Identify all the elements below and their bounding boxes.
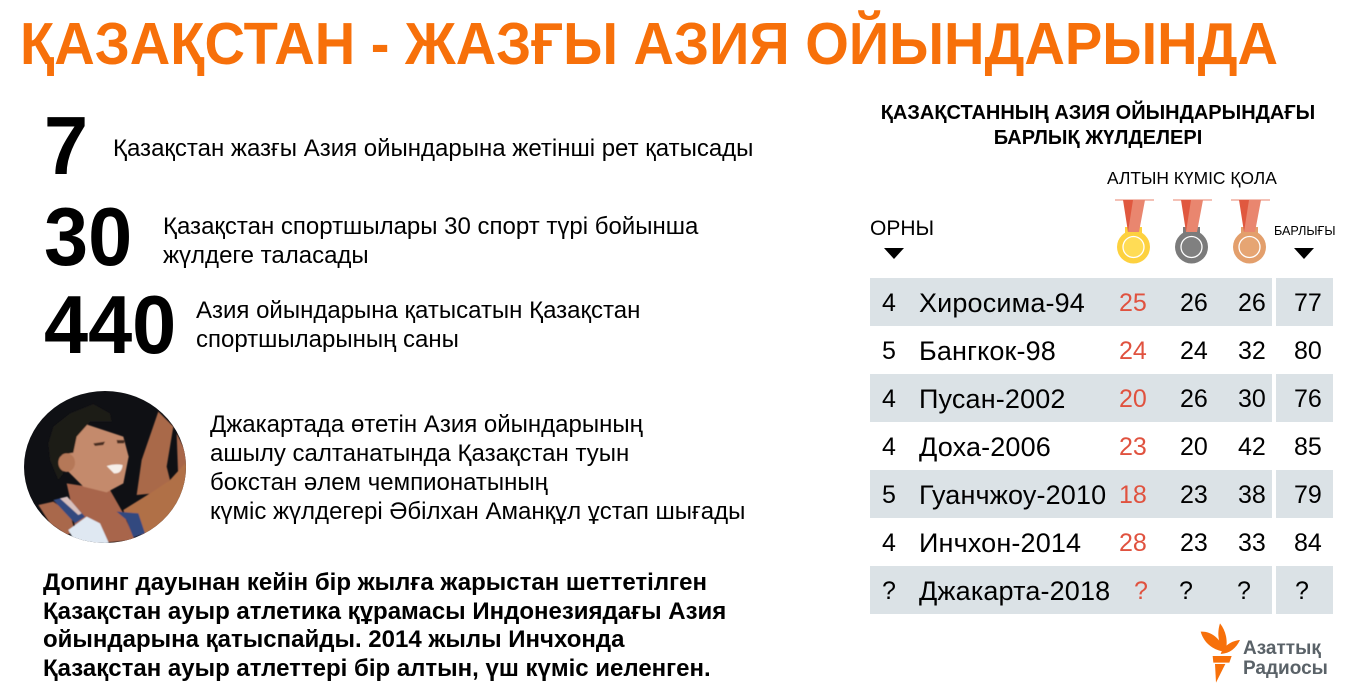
row: Bangkok-98: 32 <box>1238 337 1266 365</box>
title: ҚАЗАҚСТАН - ЖАЗҒЫ АЗИЯ ОЙЫНДАРЫНДА <box>20 11 1278 77</box>
row: Bangkok-98 <box>882 336 1322 366</box>
arrow: rank <box>884 248 904 259</box>
doping note <box>43 569 726 682</box>
doping note: Қазақстан ауыр атлеттері бір алтын, үш күміс иеленген. <box>43 654 711 682</box>
stat text: 7: Қазақстан жазғы Азия ойындарына жетінші рет қатысады <box>113 135 753 162</box>
row: Incheon-2014: 84 <box>1294 529 1322 557</box>
athlete text: ашылу салтанатында Қазақстан туын <box>210 440 629 467</box>
table heading <box>881 100 1315 149</box>
stat text: 440: спортшыларының саны <box>196 326 459 353</box>
row: Doha-2006: 42 <box>1238 433 1266 461</box>
row: Bangkok-98: 5 <box>882 337 896 365</box>
row: Hiroshima-94: 77 <box>1294 289 1322 317</box>
logo: Azattyq Radiosy <box>1200 624 1328 682</box>
stat: 7: 7 <box>44 99 88 192</box>
icon: torch <box>1200 624 1240 682</box>
row: Hiroshima-94: 4 <box>882 289 896 317</box>
row: Doha-2006: 85 <box>1294 433 1322 461</box>
stat text: 30: жүлдеге таласады <box>163 242 369 269</box>
row: Jakarta-2018: ? <box>882 577 896 605</box>
logo text: Радиосы <box>1243 658 1328 679</box>
row: Incheon-2014: 4 <box>882 529 896 557</box>
row: Busan-2002: Пусан-2002 <box>919 384 1066 414</box>
stat text: 30 <box>163 213 698 269</box>
logo text: Азаттық <box>1243 638 1321 659</box>
row: Jakarta-2018: ? <box>1179 577 1193 605</box>
column labels: medals: АЛТЫН КҮМІС ҚОЛА <box>1107 168 1277 188</box>
athlete text: бокстан әлем чемпионатының <box>210 469 548 496</box>
row: Busan-2002: 4 <box>882 385 896 413</box>
stat text: 440: Азия ойындарына қатысатын Қазақстан <box>196 297 640 324</box>
row: Guangzhou-2010: 79 <box>1294 481 1322 509</box>
row: Hiroshima-94 <box>870 278 1333 326</box>
stat: 440: 440 <box>44 278 176 371</box>
icon: silver medal <box>1173 200 1212 264</box>
row: Doha-2006: Доха-2006 <box>919 432 1051 462</box>
stat: 30: 30 <box>44 190 132 283</box>
row: Jakarta-2018: Джакарта-2018 <box>919 576 1110 606</box>
row: Guangzhou-2010 <box>870 470 1333 518</box>
stat text: 30: Қазақстан спортшылары 30 спорт түрі бойынша <box>163 213 698 240</box>
table heading: ҚАЗАҚСТАННЫҢ АЗИЯ ОЙЫНДАРЫНДАҒЫ <box>881 102 1315 124</box>
logo text <box>1243 638 1328 679</box>
row: Hiroshima-94: 26 <box>1238 289 1266 317</box>
row: Incheon-2014: 28 <box>1119 529 1147 557</box>
row: Hiroshima-94: 25 <box>1119 289 1147 317</box>
row: Busan-2002: 20 <box>1119 385 1147 413</box>
icon: gold medal <box>1115 200 1154 264</box>
arrow: total <box>1294 248 1314 259</box>
row: Guangzhou-2010: 5 <box>882 481 896 509</box>
doping note: ойындарына қатыспайды. 2014 жылы Инчхонда <box>43 626 624 653</box>
row: Busan-2002: 26 <box>1180 385 1208 413</box>
table heading: БАРЛЫҚ ЖҮЛДЕЛЕРІ <box>994 127 1202 149</box>
row: Doha-2006 <box>882 432 1322 462</box>
row: Guangzhou-2010: Гуанчжоу-2010 <box>919 480 1106 510</box>
row: Jakarta-2018 <box>870 566 1333 614</box>
row: Bangkok-98: 24 <box>1119 337 1147 365</box>
row: Jakarta-2018: ? <box>1295 577 1309 605</box>
icon: bronze medal <box>1231 200 1270 264</box>
row: Busan-2002 <box>870 374 1333 422</box>
row: Incheon-2014: 33 <box>1238 529 1266 557</box>
row: Hiroshima-94: 26 <box>1180 289 1208 317</box>
row: Incheon-2014: Инчхон-2014 <box>919 528 1081 558</box>
row: Guangzhou-2010: 38 <box>1238 481 1266 509</box>
athlete text: Джакартада өтетін Азия ойындарының <box>210 411 643 438</box>
row: Incheon-2014 <box>882 528 1322 558</box>
photo: boxer <box>24 391 186 543</box>
row: Incheon-2014: 23 <box>1180 529 1208 557</box>
doping note: Допинг дауынан кейін бір жылға жарыстан шеттетілген <box>43 569 707 596</box>
column label: total: БАРЛЫҒЫ <box>1274 224 1335 238</box>
row: Bangkok-98: 24 <box>1180 337 1208 365</box>
row: Busan-2002: 30 <box>1238 385 1266 413</box>
row: Guangzhou-2010: 23 <box>1180 481 1208 509</box>
stat text: 440 <box>196 297 640 353</box>
row: Doha-2006: 23 <box>1119 433 1147 461</box>
row: Busan-2002: 76 <box>1294 385 1322 413</box>
row: Bangkok-98: Бангкок-98 <box>919 336 1056 366</box>
column label: rank: ОРНЫ <box>870 217 934 240</box>
row: Jakarta-2018: ? <box>1237 577 1251 605</box>
row: Doha-2006: 4 <box>882 433 896 461</box>
athlete text: күміс жүлдегері Әбілхан Аманқұл ұстап шығады <box>210 498 745 525</box>
row: Hiroshima-94: Хиросима-94 <box>919 288 1085 318</box>
medal table <box>870 278 1333 614</box>
row: Jakarta-2018: ? <box>1134 577 1148 605</box>
doping note: Қазақстан ауыр атлетика құрамасы Индонезиядағы Азия <box>43 598 726 624</box>
row: Guangzhou-2010: 18 <box>1119 481 1147 509</box>
row: Doha-2006: 20 <box>1180 433 1208 461</box>
row: Bangkok-98: 80 <box>1294 337 1322 365</box>
athlete text <box>210 411 745 525</box>
